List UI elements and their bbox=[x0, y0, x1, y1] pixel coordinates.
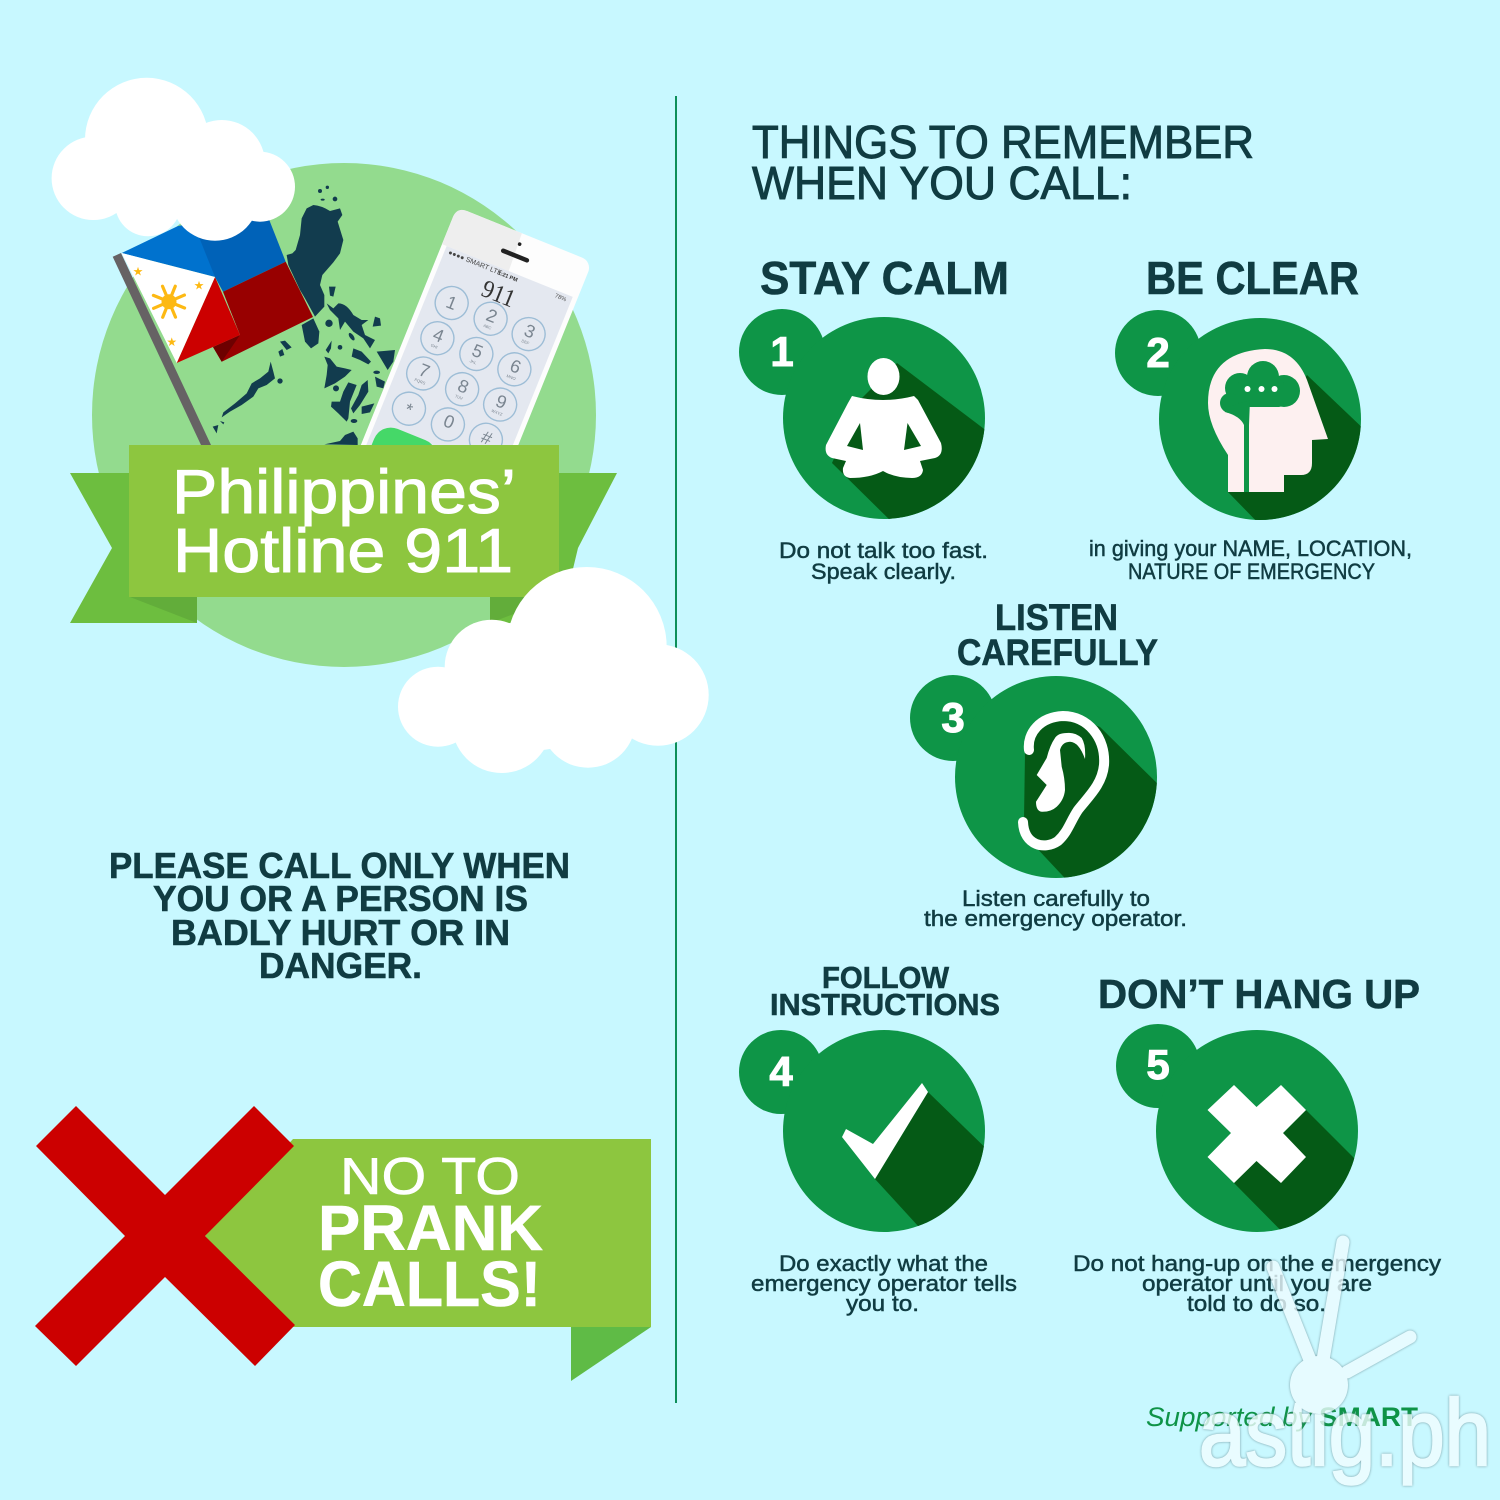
step 5: don't hang up bbox=[1073, 971, 1441, 1316]
step 5: don't hang up: operator until you are bbox=[1142, 1271, 1372, 1296]
step 2: be clear: NATURE OF EMERGENCY bbox=[1128, 559, 1375, 584]
phone showing 911 dial pad: * bbox=[402, 399, 416, 420]
phone showing 911 dial pad: 1:21 PM bbox=[497, 270, 519, 284]
phone showing 911 dial pad: DEF bbox=[521, 338, 531, 346]
Philippine flag on pole: ★ bbox=[166, 335, 177, 349]
phone showing 911 dial pad: ●●●● SMART LTE bbox=[447, 249, 503, 277]
phone showing 911 dial pad: 78% bbox=[554, 293, 568, 304]
phone showing 911 dial pad bbox=[341, 207, 592, 549]
phone showing 911 dial pad: 0 bbox=[441, 410, 457, 433]
phone showing 911 dial pad: 9 bbox=[493, 391, 510, 413]
watermark: astig.ph logo bbox=[1199, 1242, 1491, 1485]
icon: ear badge: 3 bbox=[941, 694, 965, 741]
Philippine flag on pole: ★ bbox=[194, 278, 204, 292]
icon: ear badge bbox=[910, 675, 1157, 878]
step 3: listen carefully: CAREFULLY bbox=[957, 632, 1158, 673]
heading: things to remember: THINGS TO REMEMBER bbox=[752, 116, 1254, 168]
step 4: follow instructions: you to. bbox=[846, 1291, 919, 1316]
step 4: follow instructions: Do exactly what the bbox=[779, 1251, 988, 1276]
icon: meditating person badge: 1 bbox=[770, 328, 794, 375]
phone showing 911 dial pad: 5 bbox=[469, 340, 486, 362]
step 3: listen carefully bbox=[910, 597, 1187, 931]
title ribbon bbox=[70, 445, 617, 623]
icon: check mark badge bbox=[739, 1030, 985, 1232]
phone showing 911 dial pad: WXYZ bbox=[491, 408, 504, 417]
step 4: follow instructions: emergency operator tells bbox=[751, 1271, 1017, 1296]
step 5: don't hang up: DON’T HANG UP bbox=[1098, 971, 1420, 1017]
step 3: listen carefully: LISTEN bbox=[995, 597, 1118, 638]
icon: X mark badge bbox=[1116, 1024, 1358, 1232]
step 2: be clear bbox=[1089, 252, 1412, 584]
step 1: stay calm bbox=[739, 252, 1009, 584]
heading: things to remember: WHEN YOU CALL: bbox=[752, 157, 1132, 209]
warning text block: PLEASE CALL ONLY WHEN bbox=[109, 845, 570, 886]
Philippine flag on pole bbox=[113, 216, 313, 445]
step 5: don't hang up: told to do so. bbox=[1187, 1291, 1326, 1316]
warning text block: YOU OR A PERSON IS bbox=[153, 878, 528, 919]
cloud bottom right bbox=[398, 567, 709, 773]
title text: Philippines’ bbox=[172, 458, 516, 527]
icon: red X bbox=[35, 1106, 295, 1366]
step 1: stay calm: Do not talk too fast. bbox=[779, 538, 988, 563]
phone showing 911 dial pad: GHI bbox=[430, 342, 438, 350]
warning text block: BADLY HURT OR IN bbox=[171, 912, 510, 953]
icon: meditating person badge bbox=[739, 309, 985, 519]
phone showing 911 dial pad: 7 bbox=[416, 360, 433, 382]
step 1: stay calm: STAY CALM bbox=[760, 252, 1009, 304]
step 4: follow instructions: FOLLOW bbox=[822, 960, 950, 995]
icon: head with thought tree badge bbox=[1115, 310, 1370, 530]
step 5: don't hang up: Do not hang-up on the emergency bbox=[1073, 1251, 1441, 1276]
cloud top left bbox=[52, 78, 295, 241]
phone showing 911 dial pad: MNO bbox=[506, 373, 516, 381]
hero illustration: circle background bbox=[92, 163, 596, 667]
warning text block: DANGER. bbox=[259, 945, 422, 986]
banner text: NO TO bbox=[340, 1148, 520, 1206]
phone showing 911 dial pad: 1 bbox=[443, 292, 460, 314]
supported by credit: Supported by SMART bbox=[1146, 1402, 1419, 1432]
phone showing 911 dial pad: 2 bbox=[483, 305, 500, 327]
map of the Philippines bbox=[213, 186, 395, 445]
step 4: follow instructions bbox=[739, 960, 1017, 1316]
step 4: follow instructions: INSTRUCTIONS bbox=[770, 987, 1000, 1022]
step 2: be clear: BE CLEAR bbox=[1146, 252, 1359, 304]
phone showing 911 dial pad: 6 bbox=[507, 355, 524, 378]
step 1: stay calm: Speak clearly. bbox=[811, 559, 956, 584]
phone showing 911 dial pad: # bbox=[478, 427, 495, 449]
step 2: be clear: in giving your NAME, LOCATION, bbox=[1089, 536, 1412, 561]
title text: Hotline 911 bbox=[173, 517, 513, 586]
Philippine flag on pole: ★ bbox=[133, 264, 143, 278]
phone showing 911 dial pad: JKL bbox=[469, 358, 478, 366]
phone showing 911 dial pad: PQRS bbox=[414, 377, 426, 386]
phone showing 911 dial pad: 3 bbox=[521, 320, 538, 342]
step 3: listen carefully: Listen carefully to bbox=[962, 886, 1150, 911]
banner text: CALLS! bbox=[318, 1248, 541, 1320]
icon: X mark badge: 5 bbox=[1146, 1041, 1170, 1088]
phone showing 911 dial pad: TUV bbox=[454, 393, 464, 401]
icon: check mark badge: 4 bbox=[769, 1048, 793, 1095]
step 3: listen carefully: the emergency operator. bbox=[924, 906, 1187, 931]
phone showing 911 dial pad: 8 bbox=[455, 375, 472, 398]
no prank calls banner bbox=[35, 1106, 651, 1381]
phone showing 911 dial pad: ABC bbox=[483, 323, 492, 330]
banner text: PRANK bbox=[318, 1192, 543, 1264]
phone showing 911 dial pad: 4 bbox=[430, 324, 447, 347]
phone showing 911 dial pad: 911 bbox=[477, 275, 519, 313]
icon: head with thought tree badge: 2 bbox=[1146, 329, 1170, 376]
